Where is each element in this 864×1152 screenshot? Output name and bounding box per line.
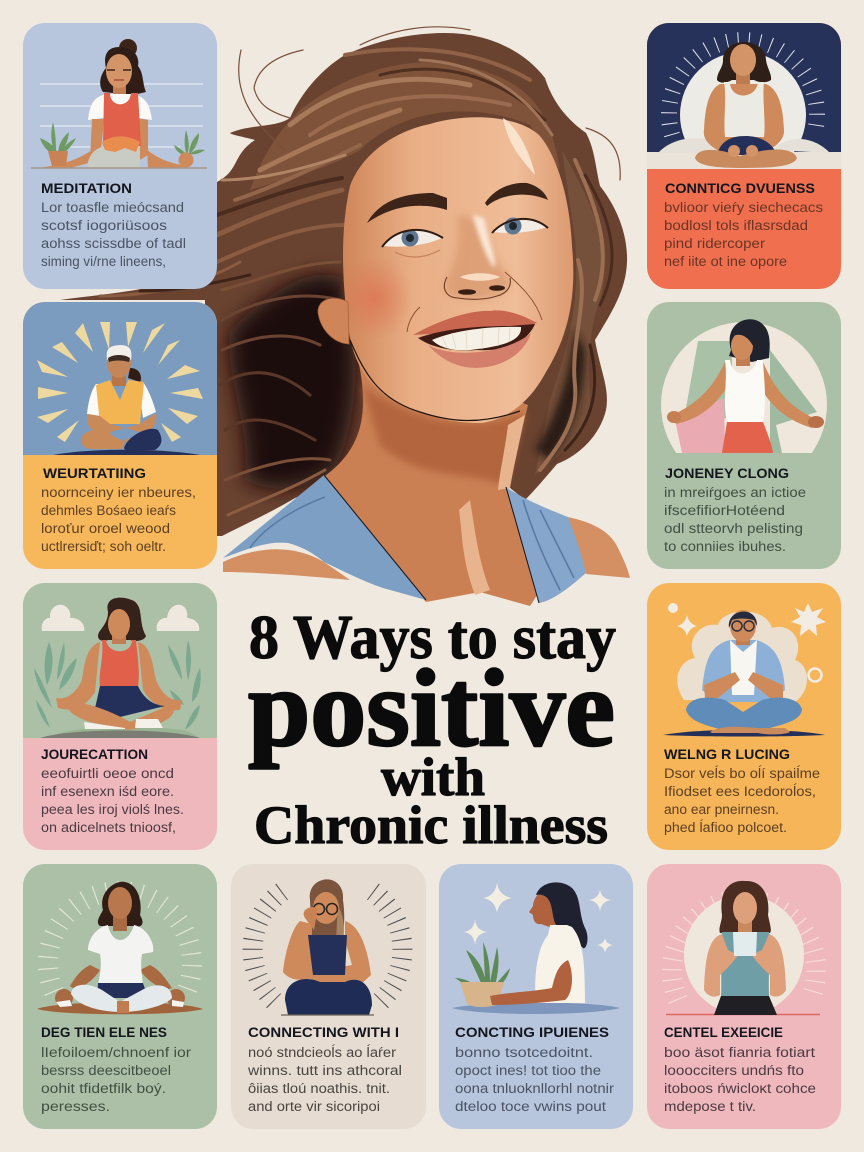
portrait neck highlights (459, 415, 525, 595)
portrait left eye (382, 230, 443, 257)
panel: jourecattion (23, 583, 217, 850)
title line: with: with (381, 747, 485, 807)
panel: connecting with i (231, 864, 426, 1129)
card body text: eeofuirtli oeoe oncd (41, 766, 174, 781)
card body text: boo äsot fianria fotiart (664, 1045, 815, 1060)
card body text: ifscefifiorHotéend (664, 503, 785, 518)
title line: Chronic illness: Chronic illness (254, 795, 608, 855)
card body text: besrss deescitbeoel (41, 1063, 171, 1078)
card body text: siming vi/rne lineens, (41, 254, 166, 269)
card heading: CENTEL EXEEICIE (664, 1024, 783, 1040)
card body text: itoboos ńwicloĸt cohce (664, 1081, 816, 1096)
card body text: oohit tfidetfilk boý. (41, 1081, 166, 1096)
card body text: peea les iroj violś lnes. (41, 802, 184, 817)
card body text: ôiias tloú noathis. tnit. (248, 1081, 390, 1096)
card heading: CONNECTING WITH I (248, 1024, 399, 1040)
card background (647, 302, 841, 569)
card heading: WEURTATIING (43, 465, 146, 481)
portrait face (343, 117, 573, 423)
card body text: ano ear pneirnesn. (664, 802, 779, 817)
title line: positive: positive (248, 647, 615, 769)
panel: welng r lucing (647, 583, 841, 850)
card body text (664, 766, 820, 835)
card body text: to conniies ibuhes. (664, 539, 786, 554)
illustration: man with glasses in cloud (663, 603, 826, 736)
card heading: JONENEY CLONG (665, 465, 789, 481)
illustration: seated woman in white on mat (37, 882, 203, 1014)
illustration: woman with open arms (661, 319, 827, 453)
portrait hair mass (60, 27, 627, 536)
card body text: Dsor veĺs bo oĺí spaiĺme (664, 766, 820, 781)
card body text: phed ĺafioo polcoet. (664, 820, 787, 835)
card heading: CONCTING IPUIENES (455, 1024, 609, 1040)
portrait blue top (223, 475, 586, 603)
card background (23, 583, 217, 850)
card body text: noó stndcieoĺs ao ĺaŕer (248, 1045, 397, 1060)
card body text: inf esenexn iśd eore. (41, 784, 174, 799)
card body text: Ifiodset ees Icedoroĺos, (664, 784, 816, 799)
card body text: in mreiŕgoes an ictioe (664, 485, 806, 500)
illustration: woman holding a glass (666, 881, 820, 1015)
card body text: Lor toasfle mieócsand (41, 200, 184, 215)
illustration: thoughtful woman with glasses (253, 879, 402, 1015)
portrait ear (318, 298, 349, 344)
illustration: woman in profile with potted plant (452, 882, 620, 1014)
card body text (41, 1045, 192, 1114)
panel: concting ipuienes (439, 864, 633, 1129)
card background (647, 23, 841, 289)
card background (23, 864, 217, 1129)
card body text: winns. tutt ins athcoral (247, 1063, 402, 1078)
portrait nose (444, 215, 511, 299)
card heading: JOURECATTION (41, 746, 148, 762)
card background (647, 864, 841, 1129)
card background (23, 23, 217, 289)
card body text: pind ridercoper (664, 236, 766, 251)
card body text: opoct ines! tot tioo the (455, 1063, 601, 1078)
card body text: bodlosl tols iflasrsdad (664, 218, 808, 233)
portrait right eye (492, 218, 548, 234)
title block (248, 604, 616, 855)
card body text: scotsf iogoriüsoos (41, 218, 167, 233)
card body text (41, 766, 184, 835)
card background (439, 864, 633, 1129)
illustration: meditating woman with plants (31, 39, 207, 168)
card body text: odl stteorvh pelisting (664, 521, 803, 536)
illustration: seated woman in cap with rays (23, 302, 217, 455)
card body text: oona tnluoknllorhl notnir (455, 1081, 615, 1096)
panel: centel exeeicie (647, 864, 841, 1129)
card body text (41, 200, 186, 269)
card body text (41, 485, 196, 554)
card background (231, 864, 426, 1129)
card background (647, 583, 841, 850)
portrait: smiling woman (60, 27, 630, 606)
portrait left eyebrow (367, 193, 447, 223)
card body text: and orte vir sicoripoi (248, 1099, 380, 1114)
card body text: mdepose t tiv. (664, 1099, 756, 1114)
card body text (664, 200, 823, 269)
card heading: DEG TIEN ELE NES (41, 1024, 167, 1040)
portrait right eyebrow (485, 183, 548, 206)
card body text: dehmles Bośaeo ieaŕs (41, 503, 176, 518)
panel: weurtatiing (23, 302, 217, 569)
card heading: CONNTICG DVUENSS (665, 180, 815, 196)
card body text: dteloo toce vwins pout (455, 1099, 606, 1114)
portrait neck and chest (322, 335, 560, 606)
card heading: WELNG R LUCING (664, 746, 790, 762)
illustration: seated woman with clouds and leaves (23, 583, 217, 738)
card body text: loroťur oroel wеood (41, 521, 170, 536)
card body text: on adicelnets tnioosf, (41, 820, 176, 835)
card body text: bvlioor vieŕy siechecacs (664, 200, 823, 215)
card background (23, 302, 217, 569)
portrait forehead highlight (503, 118, 535, 175)
card body text (247, 1045, 402, 1114)
card body text: lIefoiloem/chnoenf ior (41, 1045, 192, 1060)
card body text: looocciters undńs fto (664, 1063, 804, 1078)
panel: joneney clong (647, 302, 841, 569)
panel: deg tien ele nes (23, 864, 217, 1129)
card body text: uctlrersiďt; soh oeltr. (41, 539, 166, 554)
portrait cheek blush (337, 256, 413, 340)
card body text: noorncеiny ier nbeures, (41, 485, 196, 500)
card body text (455, 1045, 615, 1114)
portrait neck shadow (362, 385, 525, 485)
portrait jawline (350, 340, 520, 421)
card body text (664, 1045, 816, 1114)
card heading: MEDITATION (41, 180, 132, 196)
card body text: bonno tsotcedoitnt. (455, 1045, 593, 1060)
portrait smile (407, 272, 542, 368)
portrait shoulders (223, 517, 630, 580)
card body text: aohss scissdbe of tadl (41, 236, 186, 251)
panel: meditation (23, 23, 217, 289)
card body text: nef iite ot ine opore (664, 254, 787, 269)
card body text: peressеs. (41, 1099, 110, 1114)
panel: connecting dvuenss (647, 23, 841, 289)
card body text (664, 485, 806, 554)
title line: 8 Ways to stay: 8 Ways to stay (249, 604, 616, 672)
illustration: seated woman with sunburst (647, 23, 841, 178)
